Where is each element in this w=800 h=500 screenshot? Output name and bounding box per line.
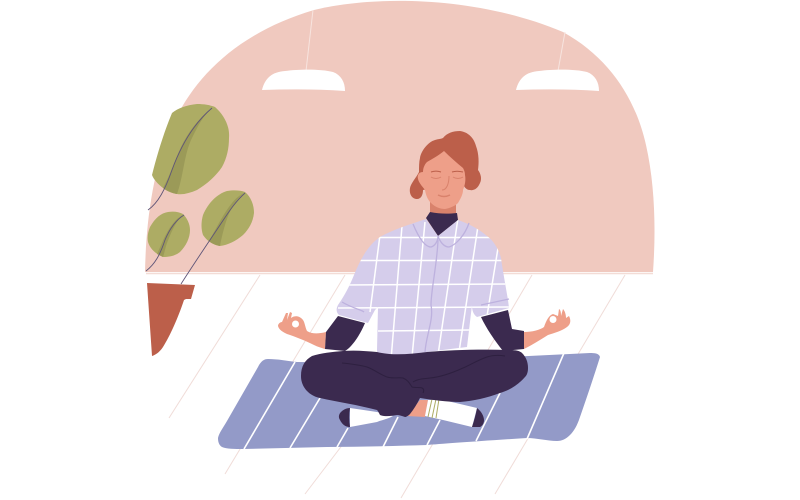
panel: pink arched wall: [145, 1, 655, 272]
shirt collar and fold lines: [342, 223, 509, 352]
neck: [430, 198, 456, 214]
wall base line: [146, 272, 653, 274]
plant: potted plant with three leaves: [146, 104, 254, 356]
yoga mat: [218, 353, 600, 449]
trousers: [301, 350, 528, 417]
leaf shadows: small: [157, 215, 183, 257]
facial features: [431, 171, 463, 196]
shirt check pattern: [338, 218, 510, 360]
shirt: [337, 218, 510, 360]
illustration: woman meditating in a room: [145, 0, 654, 498]
feet and socks: [339, 399, 484, 427]
leaf: large: [152, 104, 229, 194]
leaf: right: [202, 190, 254, 246]
lamp: left ceiling lamp: [262, 10, 345, 91]
turtleneck: [426, 212, 458, 236]
right arm and hand: [481, 309, 570, 351]
floor lines: [169, 275, 625, 498]
face: [418, 151, 465, 209]
trouser fold lines: [342, 355, 505, 393]
hair: [410, 131, 481, 199]
person: meditating woman: [278, 131, 570, 427]
leaf shadow: large: [163, 108, 212, 194]
plant stems: [146, 108, 245, 284]
leaf: small left: [148, 212, 190, 257]
plant pot: [147, 283, 195, 356]
left arm and hand: [278, 312, 365, 351]
lamp: right ceiling lamp: [516, 32, 599, 91]
mat stripes: [244, 353, 564, 449]
